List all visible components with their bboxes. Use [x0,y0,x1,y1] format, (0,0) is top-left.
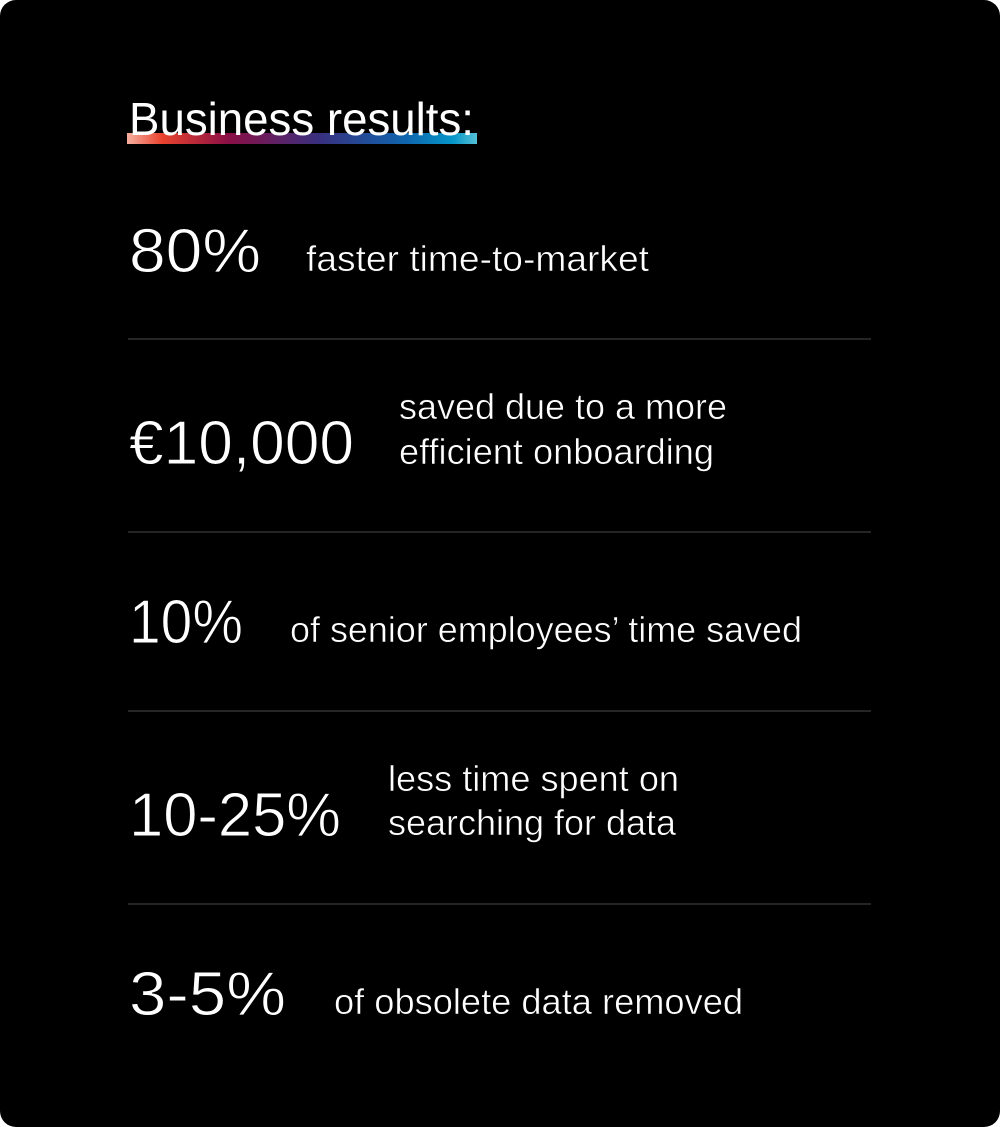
row 2: saved onboarding [129,386,727,478]
row 4: less time searching [129,758,679,850]
row 2: saved onboarding: €10,000 [129,409,354,478]
row 5: obsolete data removed: of obsolete data removed [334,981,743,1022]
row 3: senior employees time saved: 10% [129,588,243,657]
row 4: less time searching: less time spent on [388,758,679,799]
heading underline gradient [127,133,477,144]
row 3: senior employees time saved [129,588,802,657]
row 5: obsolete data removed: 3-5% [129,960,286,1029]
row 1: faster time-to-market: faster time-to-market [306,238,649,279]
row 5: obsolete data removed [129,960,743,1029]
row 2: saved onboarding: saved due to a more [399,386,727,427]
row 4: less time searching: searching for data [388,802,677,843]
row 2: saved onboarding: efficient onboarding [399,431,714,472]
row 4: less time searching: 10-25% [129,781,341,850]
row 1: faster time-to-market: 80% [129,217,261,286]
row 3: senior employees time saved: of senior employees’ time saved [290,609,802,650]
row 1: faster time-to-market [129,217,649,286]
heading: Business results: [129,93,474,145]
